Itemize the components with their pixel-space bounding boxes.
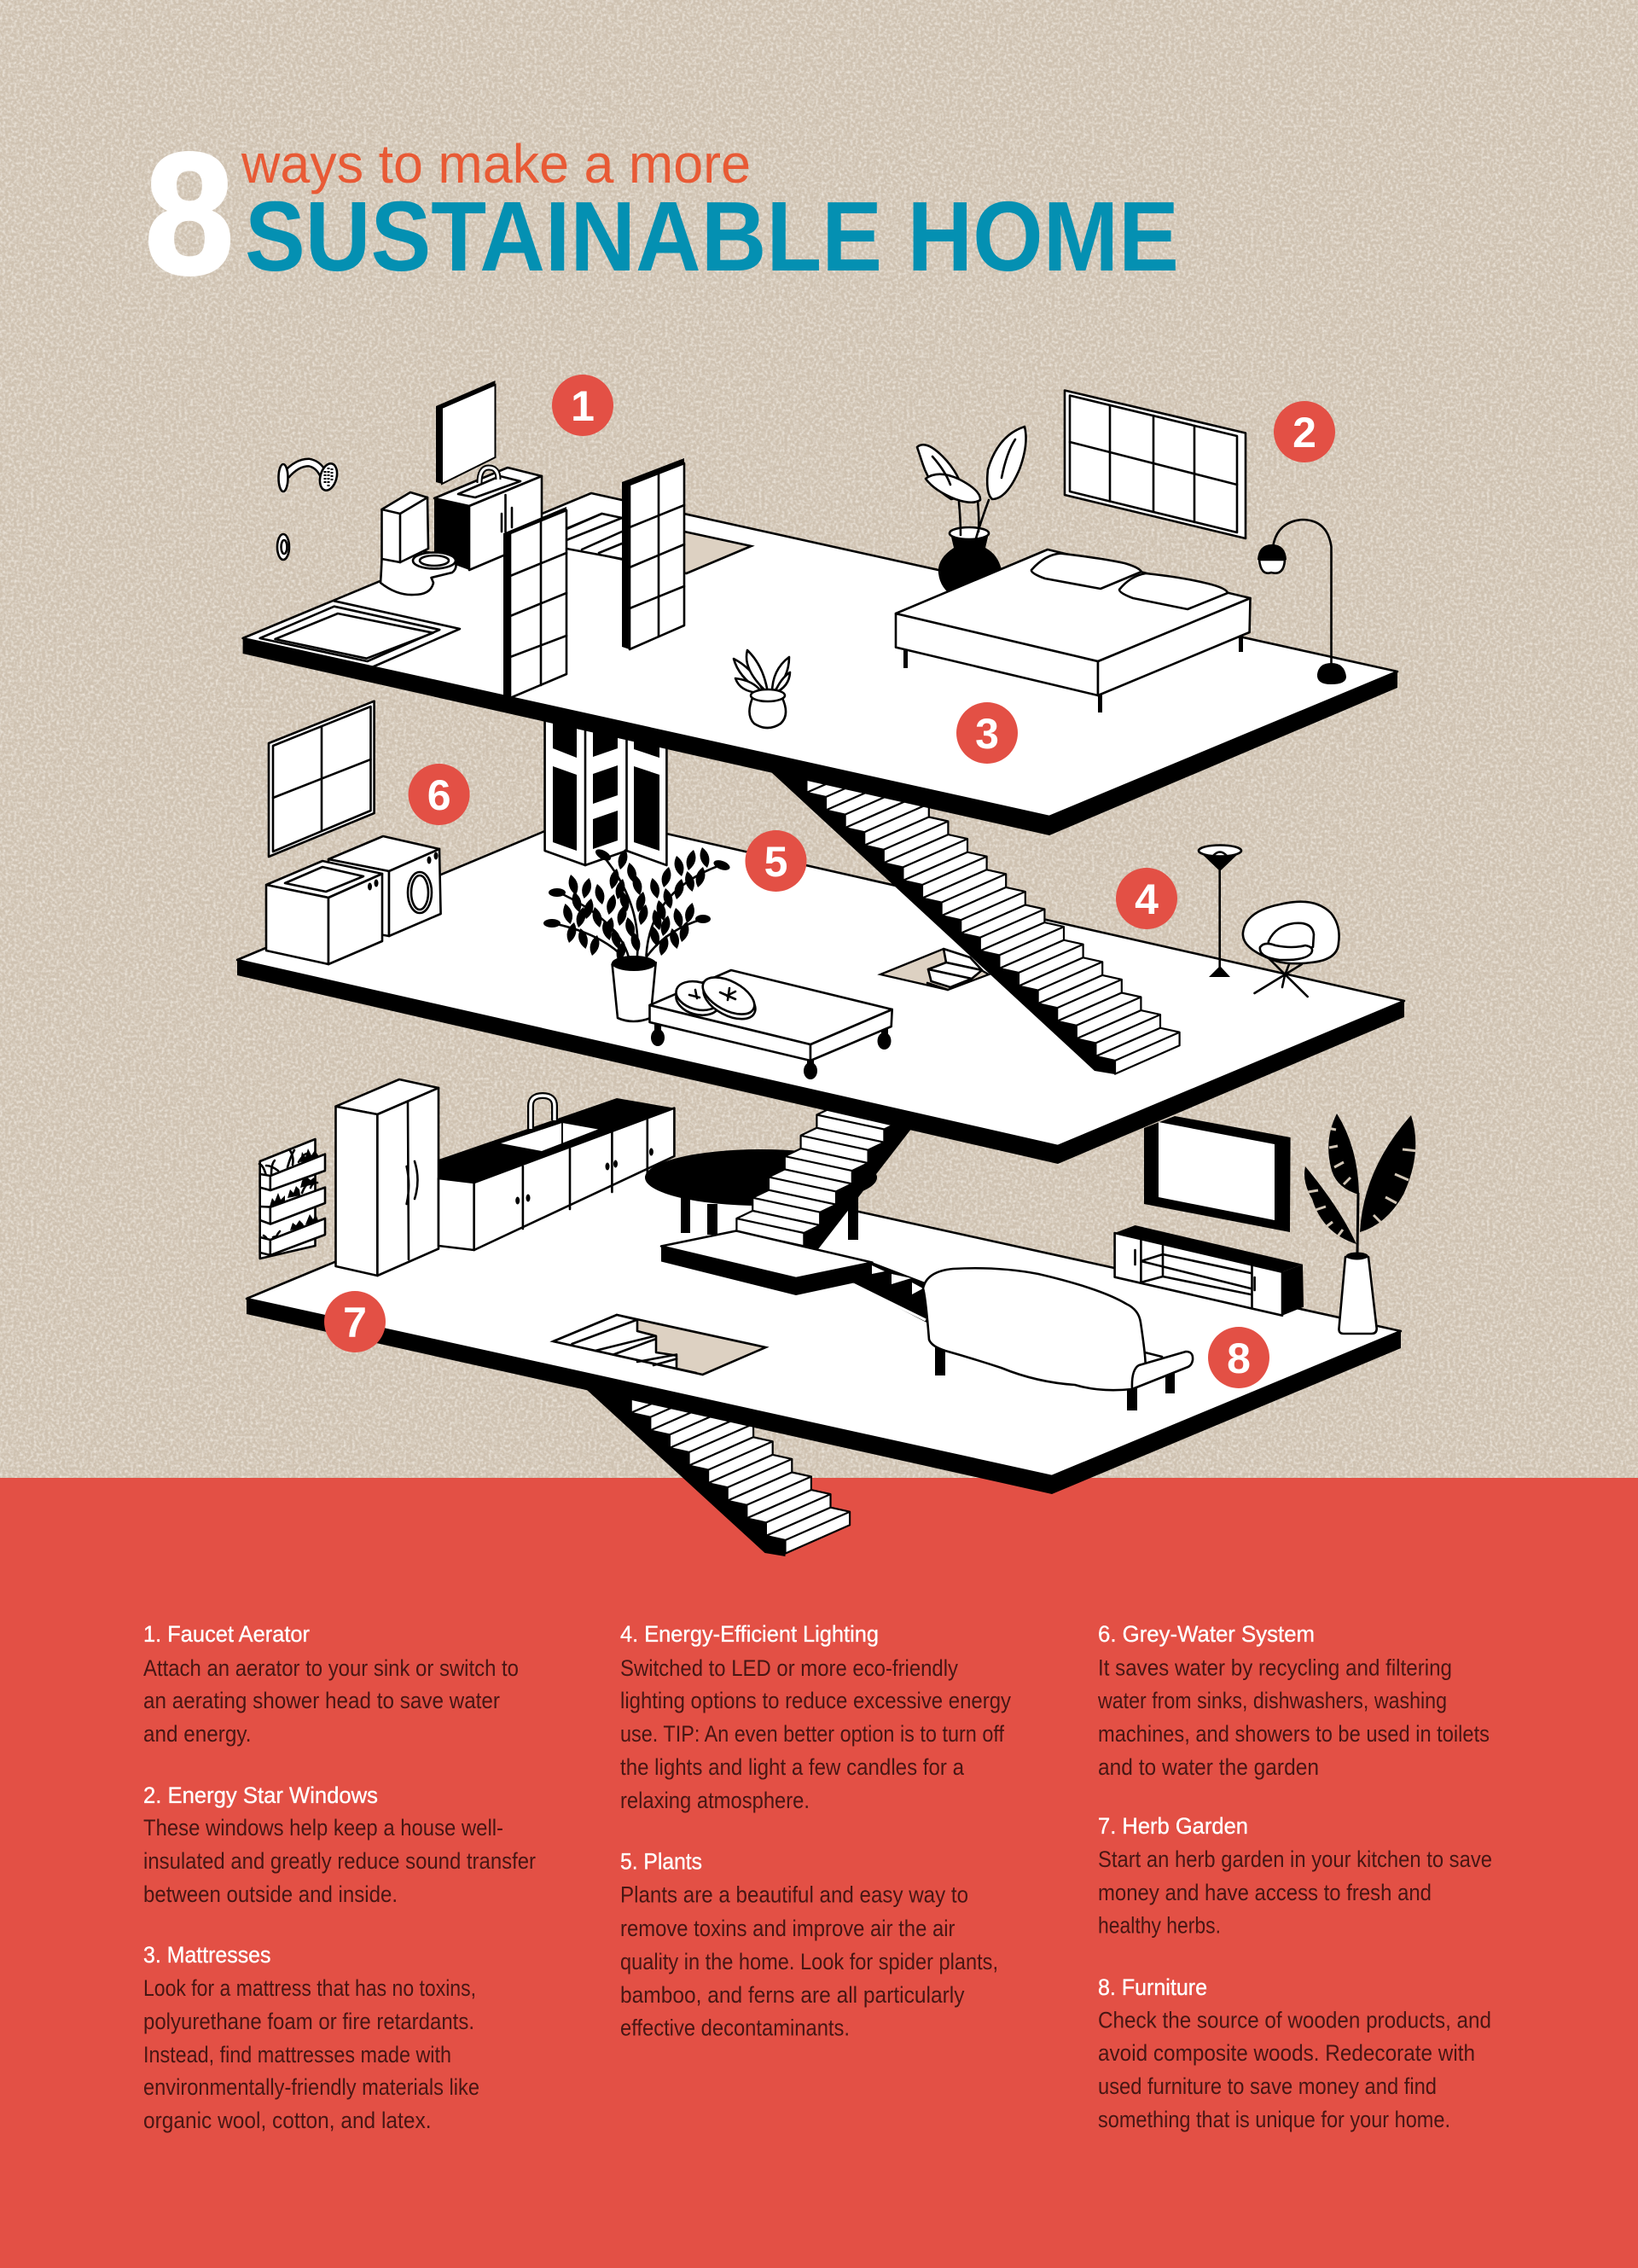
potted banana plant — [1304, 1114, 1418, 1334]
number badge 8 — [1208, 1327, 1269, 1388]
number badge 5: 5 — [764, 838, 787, 886]
pillows — [1031, 554, 1141, 589]
tip 3: mattresses: environmentally-friendly materials like — [143, 2074, 479, 2100]
stair stringer — [804, 1109, 915, 1249]
tip 8: furniture: something that is unique for your home. — [1098, 2107, 1450, 2132]
number badge 1: 1 — [571, 382, 595, 430]
lounge chair — [1243, 902, 1339, 997]
tip 5: plants — [620, 1848, 998, 2041]
shower head — [278, 462, 340, 492]
number badge 1 — [552, 375, 613, 436]
number badge 4 — [1116, 868, 1177, 929]
number badge 2 — [1274, 401, 1335, 462]
number badge 6: 6 — [427, 771, 451, 819]
tip 6: grey-water system: machines, and showers to be used in toilets — [1098, 1721, 1490, 1747]
staircase between top and middle floors — [764, 747, 1180, 1074]
bed — [896, 550, 1251, 712]
shower glass door rear — [622, 458, 684, 649]
tip 3: mattresses: polyurethane foam or fire retardants. — [143, 2009, 474, 2034]
floor slab — [243, 493, 1397, 835]
tip 4: energy-efficient lighting: lighting options to reduce excessive energy — [620, 1688, 1012, 1713]
number badge 3 — [956, 702, 1018, 764]
tip 1: faucet aerator: 1. Faucet Aerator — [143, 1621, 310, 1647]
descending stairs behind sofa — [853, 1262, 930, 1324]
refrigerator — [336, 1079, 439, 1276]
bathroom vanity — [434, 468, 542, 570]
tip 3: mattresses: Instead, find mattresses made with — [143, 2042, 451, 2067]
number badge 4: 4 — [1135, 875, 1159, 923]
window for grey water section — [269, 701, 375, 857]
arc floor lamp — [1258, 520, 1346, 684]
ground floor: kitchen and living room — [247, 1079, 1418, 1494]
tip 5: plants: 5. Plants — [620, 1848, 702, 1874]
basement staircase — [587, 1367, 850, 1556]
text column 3 — [1097, 1621, 1492, 2132]
vase with leaves — [917, 427, 1026, 597]
tip 2: energy star windows: 2. Energy Star Windows — [143, 1782, 378, 1808]
window for energy star section — [1065, 391, 1246, 538]
tip 8: furniture — [1098, 1974, 1491, 2132]
number badge 7: 7 — [343, 1299, 367, 1346]
kitchen counter — [439, 1096, 674, 1250]
tip 5: plants: Plants are a beautiful and easy way to — [620, 1882, 968, 1908]
text column 1 — [143, 1621, 536, 2133]
floor opening with stairs — [554, 1315, 766, 1375]
tip 8: furniture: used furniture to save money and find — [1098, 2073, 1437, 2099]
tip 8: furniture: Check the source of wooden products, and — [1098, 2007, 1491, 2032]
tip 2: energy star windows: between outside and inside. — [143, 1881, 398, 1907]
tip 6: grey-water system: water from sinks, dishwashers, washing — [1097, 1688, 1447, 1713]
top floor: bathroom and bedroom — [243, 381, 1397, 835]
sofa — [923, 1268, 1193, 1410]
tip 5: plants: remove toxins and improve air the air — [620, 1916, 956, 1941]
tip 5: plants: bamboo, and ferns are all particularly — [620, 1982, 965, 2008]
large potted plant — [543, 847, 731, 1021]
tip 6: grey-water system: and to water the garden — [1098, 1754, 1319, 1780]
tip 3: mattresses: Look for a mattress that has no toxins, — [143, 1975, 476, 2001]
number badge 7 — [324, 1291, 386, 1352]
shower glass door front — [503, 507, 566, 700]
tip 7: herb garden: money and have access to fresh and — [1098, 1880, 1432, 1905]
title line one: ways to make a more — [241, 133, 751, 195]
tip 3: mattresses: 3. Mattresses — [143, 1942, 271, 1968]
text column 2 — [620, 1621, 1012, 2041]
floor lamp — [1199, 845, 1241, 977]
floor slab — [237, 815, 1404, 1164]
tip 6: grey-water system: It saves water by recycling and filtering — [1098, 1655, 1452, 1681]
tip 5: plants: quality in the home. Look for spider plants, — [620, 1949, 998, 1974]
tip 7: herb garden: healthy herbs. — [1098, 1913, 1221, 1939]
number badge 5 — [746, 830, 807, 892]
shower tray — [260, 601, 460, 667]
tip 7: herb garden — [1098, 1813, 1492, 1939]
tip 7: herb garden: 7. Herb Garden — [1098, 1813, 1248, 1839]
floor opening with stairs — [537, 514, 751, 573]
tip 2: energy star windows — [143, 1782, 536, 1907]
dining table — [645, 1149, 877, 1240]
tip 2: energy star windows: These windows help keep a house well- — [143, 1815, 503, 1841]
stair landing — [661, 1230, 872, 1295]
background — [0, 0, 1638, 1478]
floor opening with stairs — [880, 949, 989, 990]
folding doors — [545, 717, 666, 865]
tip 5: plants: effective decontaminants. — [620, 2015, 850, 2041]
tip 1: faucet aerator: an aerating shower head to save water — [143, 1688, 500, 1713]
tip 4: energy-efficient lighting: use. TIP: An even better option is to turn off — [620, 1721, 1005, 1747]
number badge 2: 2 — [1292, 409, 1316, 457]
tip 1: faucet aerator: and energy. — [143, 1721, 251, 1747]
tip 2: energy star windows: insulated and greatly reduce sound transfer — [143, 1848, 536, 1874]
middle floor: laundry and lounge — [237, 701, 1404, 1164]
number badge 6 — [409, 764, 470, 825]
red text panel background — [0, 1478, 1638, 2268]
herb garden — [259, 1139, 325, 1259]
tip 6: grey-water system — [1097, 1621, 1490, 1780]
tip 4: energy-efficient lighting: 4. Energy-Efficient Lighting — [620, 1621, 879, 1647]
tip 1: faucet aerator — [143, 1621, 519, 1747]
tip 4: energy-efficient lighting: relaxing atmosphere. — [620, 1788, 810, 1813]
wall mirror — [436, 381, 495, 484]
toilet — [380, 492, 456, 595]
number badge 8: 8 — [1227, 1335, 1251, 1382]
tv stand — [1115, 1225, 1304, 1316]
tip 4: energy-efficient lighting — [620, 1621, 1012, 1813]
floor slab — [247, 1154, 1401, 1494]
wall tv — [1144, 1116, 1291, 1232]
staircase up — [736, 1108, 900, 1246]
coffee table — [650, 969, 892, 1079]
dryer — [266, 861, 382, 964]
title line two: SUSTAINABLE HOME — [245, 181, 1179, 292]
sink faucet aerator — [277, 534, 289, 560]
tip 8: furniture: avoid composite woods. Redecorate with — [1098, 2040, 1475, 2066]
tip 4: energy-efficient lighting: Switched to LED or more eco-friendly — [620, 1655, 959, 1681]
tip 6: grey-water system: 6. Grey-Water System — [1098, 1621, 1315, 1647]
tip 8: furniture: 8. Furniture — [1098, 1974, 1207, 2000]
number badge 3: 3 — [975, 710, 999, 758]
tip 3: mattresses — [143, 1942, 479, 2133]
title — [145, 117, 1179, 310]
tip 4: energy-efficient lighting: the lights and light a few candles for a — [620, 1754, 964, 1780]
tip 7: herb garden: Start an herb garden in your kitchen to save — [1098, 1846, 1492, 1872]
small potted plant — [734, 650, 790, 728]
tip 3: mattresses: organic wool, cotton, and latex. — [143, 2108, 432, 2133]
tip 1: faucet aerator: Attach an aerator to your sink or switch to — [143, 1655, 519, 1681]
cushions — [672, 969, 762, 1026]
washing machine — [328, 836, 441, 936]
big numeral 8: 8 — [145, 117, 234, 310]
